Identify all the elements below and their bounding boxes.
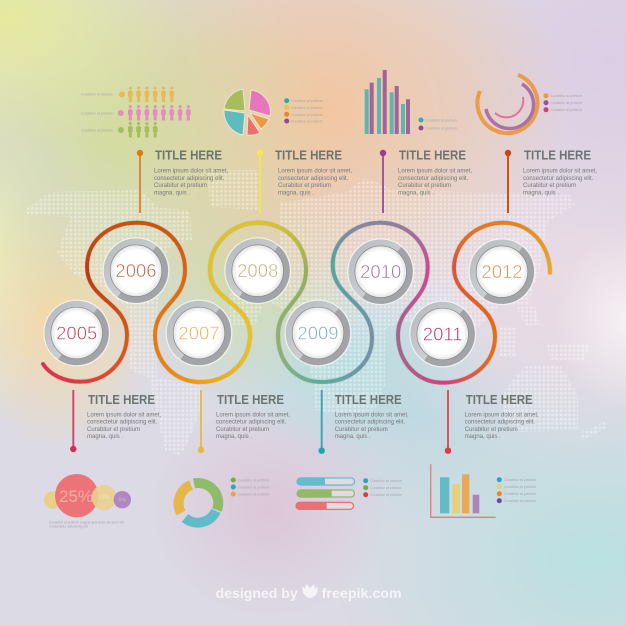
text block 2005: Lorem ipsum dolor sit amet, (87, 412, 161, 418)
text block 2006: magna, quis . (154, 190, 190, 196)
badge 2012: 2012 (481, 261, 523, 282)
text block 2007 (216, 392, 290, 440)
badge 2005 (43, 300, 110, 366)
icon: crown logo (302, 584, 318, 598)
badge 2008 (224, 237, 291, 304)
column legend: Curabitur at pretium (504, 492, 536, 496)
pie legend: Curabitur at pretium (291, 106, 323, 110)
text block 2006 (154, 148, 228, 196)
progress bars (295, 477, 354, 510)
text block 2012: consectetur adipiscing elit. (523, 176, 594, 182)
donut legend: Curabitur at pretium (238, 485, 269, 489)
text block 2012: TITLE HERE (524, 148, 591, 162)
text block 2011: TITLE HERE (466, 392, 533, 407)
connector 2008 (257, 150, 263, 213)
bubble chart: 5% (119, 498, 126, 504)
badge 2007: 2007 (178, 322, 220, 344)
bubble chart (44, 474, 131, 528)
column legend: Curabitur at pretium (504, 499, 536, 503)
text block 2012: Curabitur et pretium (523, 183, 576, 189)
progress legend: Curabitur at pretium (370, 479, 402, 483)
text block 2012: magna, quis . (523, 190, 559, 196)
donut legend: Curabitur at pretium (238, 492, 269, 496)
arcs legend (544, 93, 582, 112)
serpentine timeline ribbon (43, 223, 550, 383)
text block 2008: magna, quis . (278, 190, 314, 196)
bubble chart: 15% (99, 495, 110, 501)
bubble chart: Curabitur et pretium magna quis dolor sit amet elit (49, 520, 124, 524)
text block 2007: Lorem ipsum dolor sit amet, (216, 412, 290, 418)
people chart: Curabitur at pretium (81, 112, 113, 116)
text block 2005: consectetur adipiscing elit. (87, 420, 158, 426)
column chart (431, 464, 496, 517)
pie legend: Curabitur at pretium (291, 120, 323, 124)
text block 2005 (87, 392, 161, 440)
connector 2006 (137, 150, 143, 213)
badge 2012 (468, 238, 536, 305)
arcs legend: Curabitur at pretium (550, 108, 582, 112)
text block 2007: magna, quis . (216, 434, 252, 440)
connector 2009 (318, 390, 325, 454)
footer credit (216, 584, 402, 601)
badge 2011: 2011 (423, 324, 463, 344)
badge 2010: 2010 (360, 261, 401, 282)
text block 2010: Lorem ipsum dolor sit amet, (398, 169, 472, 175)
badge 2009: 2009 (297, 322, 339, 344)
text block 2009: consectetur adipiscing elit. (335, 420, 405, 426)
column legend: Curabitur at pretium (504, 485, 536, 489)
badge 2007 (166, 300, 232, 366)
vertical bar chart: Curabitur at pretium (425, 126, 457, 130)
donut legend (231, 478, 269, 496)
connector 2011 (445, 390, 451, 454)
badge 2006 (102, 237, 170, 304)
text block 2010: TITLE HERE (399, 148, 466, 162)
text block 2006: consectetur adipiscing elit. (154, 176, 225, 182)
text block 2008: TITLE HERE (275, 148, 342, 162)
text block 2010: consectetur adipiscing elit. (398, 176, 469, 182)
text block 2012: Lorem ipsum dolor sit amet, (523, 169, 597, 175)
text block 2006: Lorem ipsum dolor sit amet, (154, 169, 228, 175)
text block 2010 (398, 148, 472, 196)
text block 2011: Lorem ipsum dolor sit amet, (465, 412, 539, 418)
pie legend (284, 98, 323, 124)
footer credit: designed by (216, 585, 298, 601)
text block 2007: Curabitur et pretium (216, 427, 269, 433)
text block 2009 (335, 392, 409, 440)
connector 2012 (505, 150, 511, 213)
bubble chart: consectetur adipiscing elit (49, 524, 88, 528)
people chart: Curabitur at pretium (81, 92, 113, 96)
text block 2007: consectetur adipiscing elit. (216, 420, 287, 426)
badge 2005: 2005 (56, 322, 97, 344)
badge 2009 (284, 300, 352, 366)
pie legend: Curabitur at pretium (291, 99, 323, 103)
badge 2006: 2006 (115, 260, 157, 281)
world map dots (27, 170, 606, 455)
bubble chart: 25% (59, 487, 93, 506)
text block 2009: TITLE HERE (335, 392, 402, 407)
concentric arcs chart (477, 75, 537, 133)
text block 2009: Lorem ipsum dolor sit amet, (335, 412, 409, 418)
vertical bar chart (365, 70, 457, 134)
arcs legend: Curabitur at pretium (550, 94, 582, 98)
progress legend (363, 478, 402, 497)
people chart: Curabitur at pretium (81, 128, 113, 132)
pie chart (224, 89, 270, 135)
text block 2007: TITLE HERE (217, 392, 284, 407)
text block 2006: TITLE HERE (155, 148, 222, 162)
text block 2005: magna, quis . (87, 434, 123, 440)
text block 2008: Curabitur et pretium (278, 183, 331, 189)
text block 2011: Curabitur et pretium (465, 427, 518, 433)
badge 2011 (409, 300, 476, 368)
connector 2005 (70, 390, 77, 452)
text block 2011: magna, quis . (465, 434, 501, 440)
connector 2007 (198, 390, 204, 453)
pie legend: Curabitur at pretium (291, 113, 323, 117)
donut chart (179, 483, 218, 523)
text block 2008: Lorem ipsum dolor sit amet, (278, 169, 352, 175)
progress legend: Curabitur at pretium (370, 493, 402, 497)
text block 2011 (465, 392, 539, 440)
text block 2012 (523, 148, 597, 196)
text block 2005: Curabitur et pretium (87, 427, 140, 433)
badge 2010 (347, 238, 414, 305)
arcs legend: Curabitur at pretium (550, 101, 582, 105)
text block 2008: consectetur adipiscing elit. (278, 176, 349, 182)
footer credit: freepik.com (322, 585, 402, 601)
column legend: Curabitur at pretium (504, 478, 536, 482)
text block 2006: Curabitur et pretium (154, 183, 207, 189)
donut legend: Curabitur at pretium (238, 478, 269, 482)
connector 2010 (380, 150, 386, 213)
text block 2010: magna, quis . (398, 190, 434, 196)
text block 2009: Curabitur et pretium (335, 427, 388, 433)
badge 2008: 2008 (237, 260, 278, 281)
text block 2010: Curabitur et pretium (398, 183, 451, 189)
column legend (497, 477, 536, 503)
text block 2011: consectetur adipiscing elit. (465, 420, 535, 426)
text block 2005: TITLE HERE (88, 392, 155, 407)
text block 2009: magna, quis . (335, 434, 371, 440)
progress legend: Curabitur at pretium (370, 486, 402, 490)
text block 2008 (275, 148, 352, 196)
vertical bar chart: Curabitur at pretium (425, 118, 457, 122)
people chart (81, 86, 191, 138)
